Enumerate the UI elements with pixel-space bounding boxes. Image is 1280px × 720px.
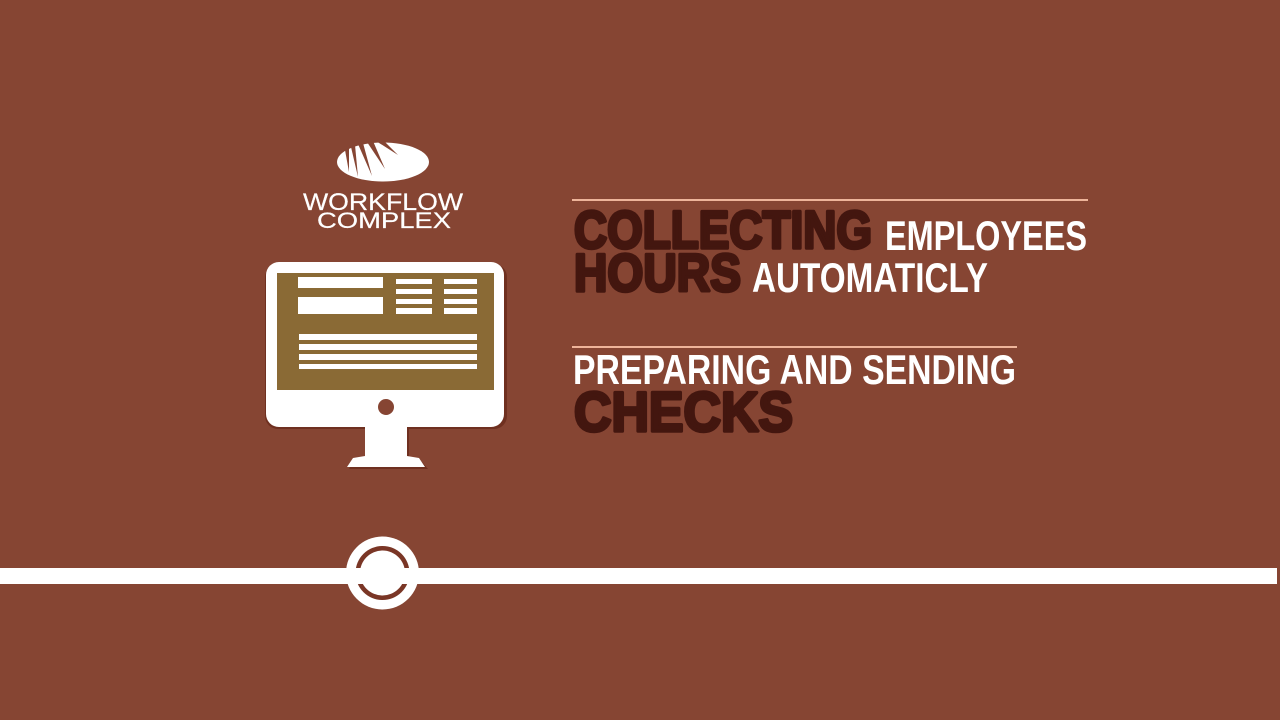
timeline bar — [0, 568, 1277, 584]
divider rule — [572, 199, 1088, 201]
icon: desktop monitor with form on screen — [265, 262, 507, 469]
monitor stand — [347, 426, 425, 467]
logo wordmark — [303, 189, 463, 233]
heading: checks: CHECKS — [574, 380, 793, 443]
heading: collecting: COLLECTING — [574, 201, 872, 260]
text block: preparing and sending checks — [572, 346, 1017, 443]
timeline marker — [346, 536, 419, 610]
monitor power button — [378, 399, 394, 415]
heading: hours: HOURS — [574, 244, 741, 303]
heading: automaticly: AUTOMATICLY — [752, 254, 988, 301]
logo icon: ellipse with rays — [337, 141, 429, 182]
divider rule — [572, 346, 1017, 348]
screen form blocks — [298, 277, 477, 369]
monitor shadow — [265, 264, 507, 469]
logo wordmark: COMPLEX — [317, 208, 451, 233]
logo wordmark: WORKFLOW — [303, 189, 463, 216]
monitor screen — [277, 273, 494, 390]
logo: Workflow Complex — [303, 141, 463, 233]
timeline with marker — [0, 536, 1277, 610]
text block: collecting employees hours automaticly — [572, 199, 1088, 303]
heading: employees: EMPLOYEES — [885, 212, 1087, 259]
monitor body — [266, 262, 504, 427]
heading: preparing and sending: PREPARING AND SENDING — [573, 346, 1016, 393]
